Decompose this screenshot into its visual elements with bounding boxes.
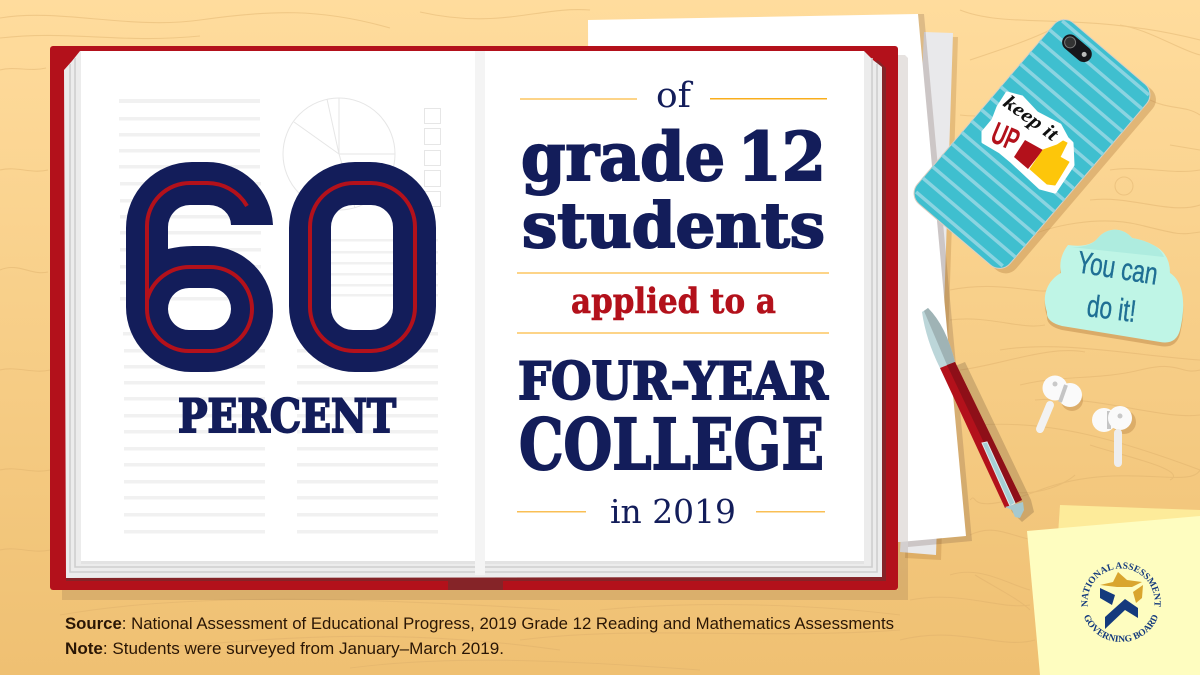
red cover [50,46,898,590]
thumbs up cuff [1014,140,1043,169]
pen tip cone [922,308,955,368]
pen shadow [950,362,1034,522]
stack of papers behind the book [588,14,972,560]
blue star shapes [1100,588,1115,605]
white paper [588,14,966,542]
phone case [908,14,1156,274]
pen barrel [940,362,1022,508]
sticky note: you can do it [1045,230,1183,342]
gold star [1100,572,1142,587]
page stack [64,51,882,578]
open book [50,46,898,590]
in 2019: in 2019 [610,492,736,531]
headline text on right page [517,76,829,531]
grade 12: grade 12 [521,118,826,196]
grey paper [900,32,953,555]
you can: You can [1075,244,1160,292]
FOUR-YEAR: FOUR-YEAR [518,352,829,412]
sticker: keep it up [983,91,1073,192]
phone [908,14,1156,274]
pen end cap [1005,502,1024,518]
front note [1027,516,1200,675]
phone shadow [914,19,1162,279]
left and right page [81,51,864,561]
big number 60 [126,162,436,372]
UP: UP [986,115,1025,158]
case stripes [912,17,1153,270]
left earbud [1040,376,1083,429]
centre fold [475,51,485,575]
sticker backing [983,93,1073,192]
dark inner edge of the cover [66,60,886,590]
note line: Note: Students were surveyed from January–March 2019. [65,640,504,658]
rule [517,332,829,334]
students: students [522,189,825,262]
faded left page text lines [119,99,438,534]
white paper shadow [908,14,972,547]
logo: National Assessment Governing Board [1081,562,1161,642]
rule right of year [756,511,825,512]
right earbud [1092,406,1136,463]
faded pie chart with legend boxes [283,98,440,210]
digit 6 [126,162,273,372]
logo bottom text: GOVERNING BOARD [1084,615,1158,642]
COLLEGE: COLLEGE [519,403,824,486]
red inline of digit 0 [310,183,415,351]
thumbs up hand [1030,141,1069,185]
sticky note shadow [1045,234,1183,346]
pen clip [982,442,1015,506]
rule [517,272,829,274]
source and note [65,615,894,658]
label: percent: PERCENT [178,389,396,443]
digit 0 [289,162,436,372]
tape strip at top of note [1070,230,1164,257]
grey paper shadow [905,37,958,560]
cloud shaped note [1045,230,1183,342]
book shadow [62,55,908,600]
source line: Source: National Assessment of Educational Progress, 2019 Grade 12 Reading and Mathematics Assessments [65,615,894,633]
do it!: do it! [1085,288,1138,329]
rule right of "of" [710,98,827,100]
rule left of year [517,511,586,512]
logo top text: NATIONAL ASSESSMENT [1081,562,1161,607]
camera [1059,31,1095,65]
earbuds [1040,376,1136,463]
back note [1058,505,1200,535]
yellow sticky notes [1027,505,1200,675]
rule left of "of" [520,98,637,100]
pen [922,308,1024,518]
"of": of [656,76,694,116]
red inline of digit 6 [147,183,252,351]
applied to a: applied to a [571,281,776,322]
keep it: keep it [999,91,1063,146]
